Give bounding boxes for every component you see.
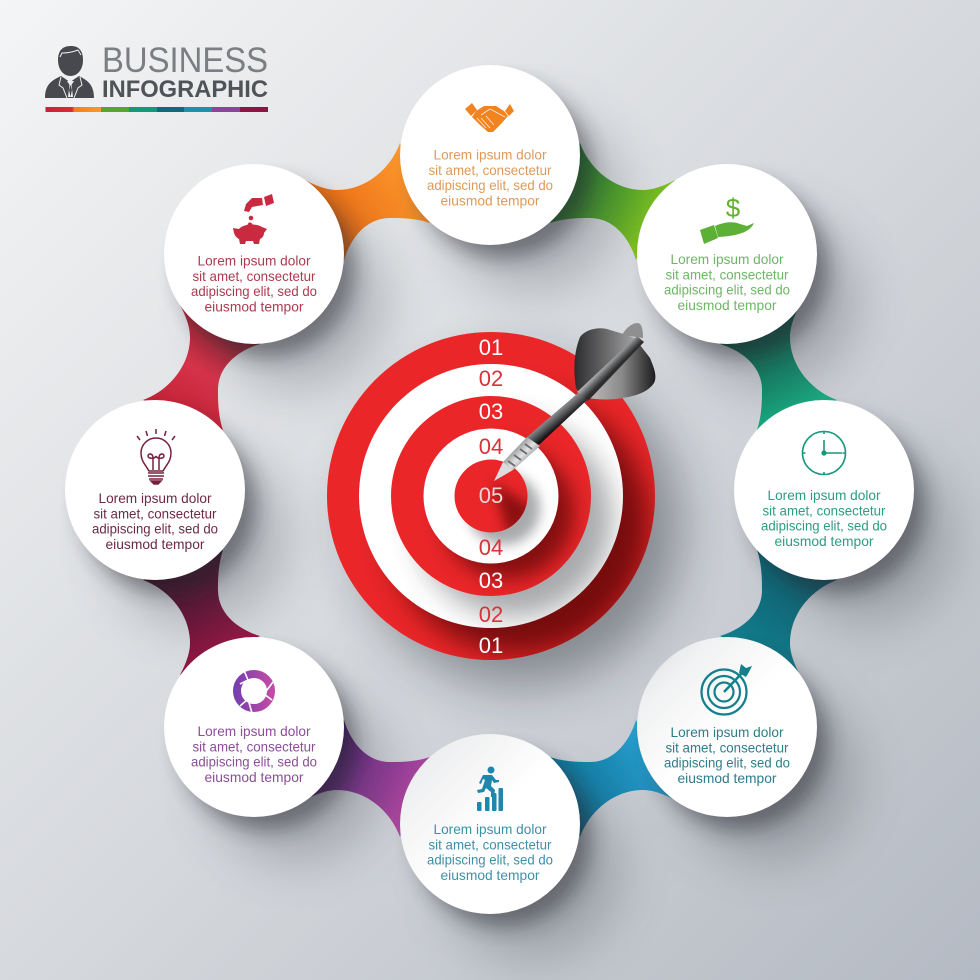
text: eiusmod tempor <box>678 297 777 313</box>
panel: step top left piggy bank <box>164 164 344 344</box>
target board <box>327 332 655 660</box>
text: adipiscing elit, sed do <box>191 283 317 299</box>
text: adipiscing elit, sed do <box>664 754 790 770</box>
icon: dart <box>494 323 655 481</box>
ring 5 <box>454 460 528 532</box>
ring numbers: 04 <box>479 434 503 459</box>
text: eiusmod tempor <box>678 770 777 786</box>
heading: infographic: INFOGRAPHIC <box>102 76 268 103</box>
text: Lorem ipsum dolor <box>670 724 784 740</box>
icon: businessman <box>45 46 94 98</box>
text: sit amet, consectetur <box>192 268 316 284</box>
ring numbers: 03 <box>479 399 503 424</box>
text: eiusmod tempor <box>440 192 540 208</box>
ring numbers <box>479 335 503 658</box>
ring numbers: 05 <box>479 483 503 508</box>
panel: step left bulb <box>65 400 245 580</box>
panel: step bottom runner <box>400 734 580 914</box>
ring 3 <box>391 396 591 596</box>
text: adipiscing elit, sed do <box>427 852 553 868</box>
text: eiusmod tempor <box>774 533 874 549</box>
connector: green <box>550 143 675 260</box>
ring 2 <box>359 364 623 628</box>
panel: step bottom right target <box>637 637 817 817</box>
text: Lorem ipsum dolor <box>434 146 547 162</box>
connector: purple <box>305 720 430 837</box>
text: sit amet, consectetur <box>666 740 789 756</box>
text: sit amet, consectetur <box>94 506 217 522</box>
text <box>191 723 317 785</box>
heading: business: BUSINESS <box>102 41 268 80</box>
text: sit amet, consectetur <box>192 738 316 754</box>
icon: target <box>702 664 752 714</box>
ring 4 <box>424 428 558 564</box>
icon: runner on bars <box>477 766 503 811</box>
ring numbers: 02 <box>479 602 503 627</box>
text: adipiscing elit, sed do <box>664 282 790 298</box>
connector: teal <box>720 550 837 675</box>
title block <box>45 41 268 112</box>
text: eiusmod tempor <box>440 867 540 883</box>
text <box>92 490 218 552</box>
dart barrel <box>527 393 587 445</box>
panel: step top right money <box>637 164 817 344</box>
colour bar <box>46 107 268 112</box>
text: adipiscing elit, sed do <box>191 754 317 770</box>
ring numbers: 03 <box>479 568 503 593</box>
connector: red <box>143 305 260 430</box>
text <box>191 252 317 314</box>
text: Lorem ipsum dolor <box>198 723 311 739</box>
text <box>427 146 553 208</box>
connector: maroon <box>143 550 260 675</box>
text <box>761 487 887 549</box>
text <box>664 251 790 313</box>
dart flights <box>574 323 655 400</box>
text: eiusmod tempor <box>204 298 304 314</box>
text: sit amet, consectetur <box>428 836 552 852</box>
icon: hand and piggy bank <box>233 194 274 244</box>
connector: emerald <box>720 305 837 430</box>
text: sit amet, consectetur <box>666 266 789 282</box>
ring 1 <box>327 332 655 660</box>
text: Lorem ipsum dolor <box>670 251 784 267</box>
text: sit amet, consectetur <box>762 502 886 518</box>
panel: step right clock <box>734 400 914 580</box>
icon: hand with dollar: $ <box>726 193 741 223</box>
panel: step top handshake <box>400 65 580 245</box>
text: Lorem ipsum dolor <box>98 490 212 506</box>
text <box>664 724 790 786</box>
dart needle <box>494 462 513 481</box>
text: Lorem ipsum dolor <box>198 252 311 268</box>
dart metal grip <box>503 437 540 470</box>
icon: clock <box>802 431 846 475</box>
icon: circular arrows <box>237 668 273 713</box>
panel: step bottom left cycle <box>164 637 344 817</box>
icon: hand with dollar <box>700 193 754 244</box>
text: sit amet, consectetur <box>428 162 552 178</box>
text: adipiscing elit, sed do <box>92 520 218 536</box>
text: Lorem ipsum dolor <box>768 487 881 503</box>
connector: orange <box>305 143 430 260</box>
dart shaft <box>577 336 644 401</box>
icon: light bulb <box>137 429 175 484</box>
icon: handshake <box>465 103 514 132</box>
ring numbers: 02 <box>479 366 503 391</box>
connector: blue <box>550 720 675 837</box>
text: adipiscing elit, sed do <box>761 518 887 534</box>
ring numbers: 01 <box>479 335 503 360</box>
ring numbers: 01 <box>479 633 503 658</box>
ring numbers: 04 <box>479 535 503 560</box>
text <box>427 821 553 883</box>
text: eiusmod tempor <box>106 536 205 552</box>
text: adipiscing elit, sed do <box>427 177 553 193</box>
text: eiusmod tempor <box>204 769 304 785</box>
text: Lorem ipsum dolor <box>434 821 547 837</box>
